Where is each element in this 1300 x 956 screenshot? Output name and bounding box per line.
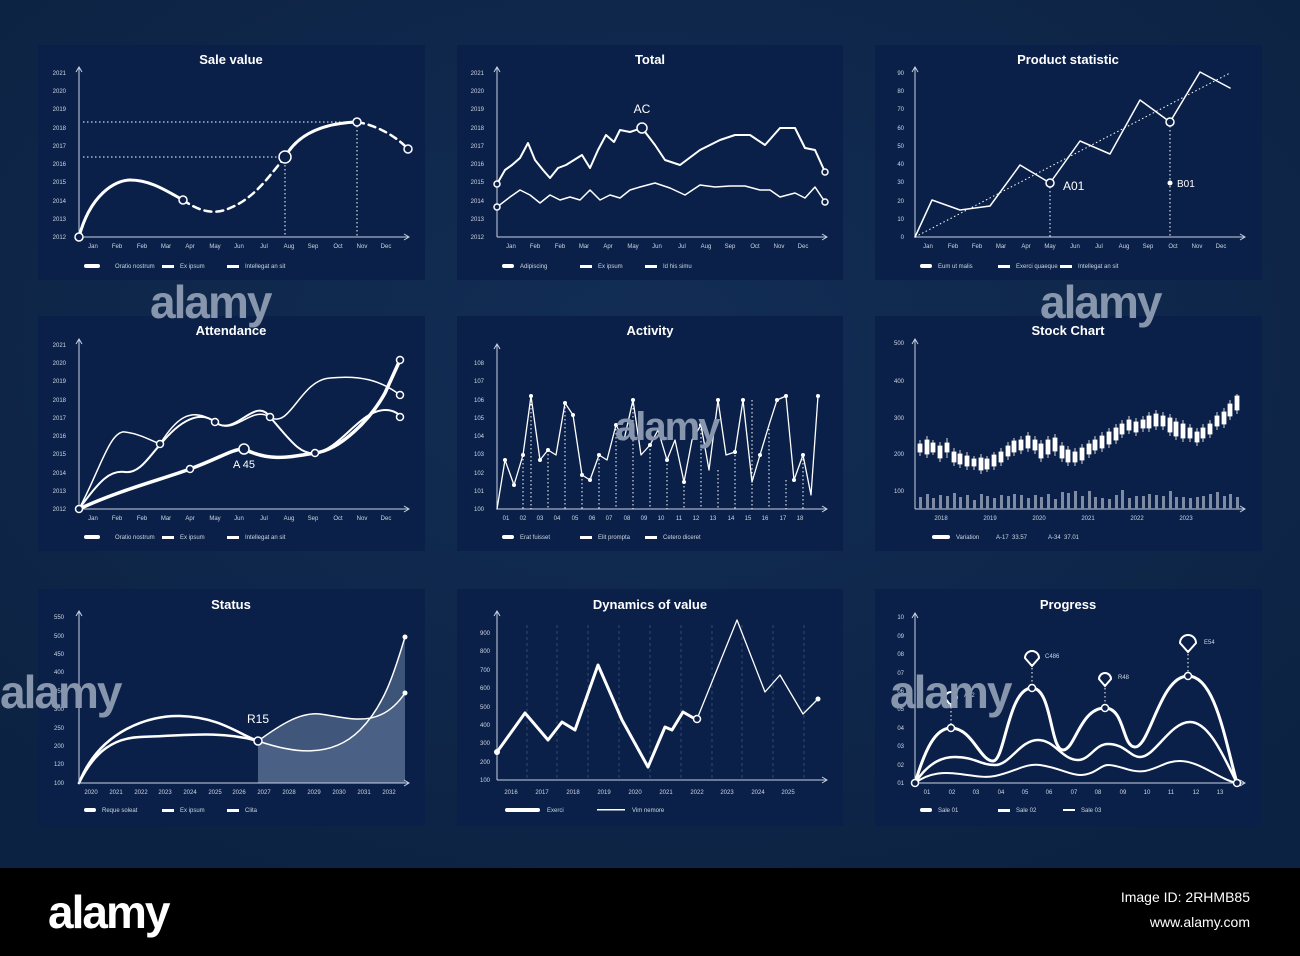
- panel: attendance: 2013: [53, 489, 67, 495]
- panel: total: [457, 45, 843, 280]
- legend: A-34 37.01: [1048, 535, 1080, 541]
- panel: status: 550: [54, 615, 65, 621]
- panel: status: 2032: [382, 790, 396, 796]
- panel: status: 2024: [183, 790, 197, 796]
- panel: status: 2027: [257, 790, 271, 796]
- panel: progress: 02: [949, 790, 956, 796]
- panel: stock chart: 2020: [1032, 516, 1046, 522]
- panel: activity: 18: [797, 516, 804, 522]
- legend: Exerci: [547, 808, 564, 814]
- title: dynamics of value: Dynamics of value: [593, 597, 707, 612]
- panel: progress: 08: [897, 652, 905, 658]
- panel: attendance: May: [209, 516, 221, 522]
- panel: progress: 04: [998, 790, 1005, 796]
- panel: total: 2013: [471, 217, 485, 223]
- legend: Reque soleat: [102, 808, 138, 814]
- legend: Eum ut malis: [938, 264, 973, 270]
- panel: sale value: Mar: [161, 244, 171, 250]
- legend: Sale 01: [938, 808, 959, 814]
- legend: Ex ipsum: [180, 264, 205, 270]
- line chart: total: [494, 102, 828, 210]
- legend: [920, 808, 1102, 814]
- panel: status: 2026: [232, 790, 246, 796]
- line chart: attendance: A 45: [233, 459, 255, 471]
- panel: status: 350: [54, 689, 65, 695]
- panel: attendance: 2019: [53, 379, 67, 385]
- legend: [502, 264, 692, 270]
- panel: dynamics of value: 2021: [659, 790, 673, 796]
- panel: progress: [875, 589, 1262, 826]
- panel: total: May: [627, 244, 639, 250]
- panel: progress: 13: [1217, 790, 1224, 796]
- panel: total: Oct: [750, 244, 760, 250]
- legend: Intellegat an sit: [245, 535, 286, 541]
- panel: activity: 17: [780, 516, 787, 522]
- panel: attendance: Aug: [284, 516, 294, 522]
- panel: product statistic: Apr: [1021, 244, 1031, 250]
- panel: dynamics of value: 400: [480, 723, 491, 729]
- panel: progress: 10: [1144, 790, 1151, 796]
- panel: sale value: Jul: [260, 244, 268, 250]
- panel: sale value: Aug: [284, 244, 294, 250]
- panel: dynamics of value: 800: [480, 649, 491, 655]
- panel: sale value: 2019: [53, 107, 67, 113]
- legend: Oratio nostrum: [115, 535, 155, 541]
- legend: [932, 535, 1080, 541]
- panel: product statistic: 60: [897, 126, 905, 132]
- legend: Intellegat an sit: [245, 264, 286, 270]
- panel: status: 2029: [307, 790, 321, 796]
- panel: status: 2021: [109, 790, 123, 796]
- panel: sale value: Apr: [185, 244, 195, 250]
- panel: activity: 101: [474, 489, 485, 495]
- line chart: progress: C486: [1045, 654, 1060, 660]
- panel: progress: 03: [897, 744, 905, 750]
- legend: Exerci quaeque: [1016, 264, 1058, 270]
- panel: status: 300: [54, 707, 65, 713]
- panel: dynamics of value: 200: [480, 760, 491, 766]
- panel: sale value: Sep: [308, 244, 319, 250]
- panel: product statistic: Feb: [972, 244, 983, 250]
- panel: activity: 01: [503, 516, 510, 522]
- panel: total: 2020: [471, 89, 485, 95]
- panel: activity: 14: [728, 516, 735, 522]
- panel: dynamics of value: 2025: [781, 790, 795, 796]
- panel: product statistic: 80: [897, 89, 905, 95]
- legend: Variation: [956, 535, 979, 541]
- title: stock chart: Stock Chart: [1032, 323, 1105, 338]
- watermarks: alamy: [1040, 276, 1163, 328]
- panel: attendance: Jan: [88, 516, 98, 522]
- panel: sale value: 2012: [53, 235, 67, 241]
- panel: progress: 11: [1168, 790, 1175, 796]
- panel: sale value: Jun: [234, 244, 244, 250]
- panel: product statistic: 70: [897, 107, 905, 113]
- panel: product statistic: 30: [897, 180, 905, 186]
- legend: A-17 33.57: [996, 535, 1028, 541]
- footer bar: alamy: [48, 886, 171, 938]
- panel: stock chart: [875, 316, 1262, 551]
- panel: sale value: 2016: [53, 162, 67, 168]
- panel: activity: 10: [658, 516, 665, 522]
- panel: stock chart: 2018: [934, 516, 948, 522]
- line chart: activity: [497, 394, 820, 509]
- panel: dynamics of value: 2017: [535, 790, 549, 796]
- watermarks: alamy: [615, 405, 721, 449]
- title: activity: Activity: [627, 323, 674, 338]
- panel: status: 100: [54, 781, 65, 787]
- watermarks: [0, 276, 1163, 718]
- panel: activity: 03: [537, 516, 544, 522]
- panel: sale value: 2013: [53, 217, 67, 223]
- line chart: progress: A12: [964, 693, 975, 699]
- panel: stock chart: 100: [894, 489, 905, 495]
- legend: [84, 535, 286, 541]
- panel: product statistic: 20: [897, 199, 905, 205]
- panel: sale value: 2014: [53, 199, 67, 205]
- panel: product statistic: Jan: [923, 244, 933, 250]
- panel: progress: 06: [1046, 790, 1053, 796]
- panel: dynamics of value: 900: [480, 631, 491, 637]
- area chart: status: R15: [247, 712, 269, 726]
- panel: activity: 107: [474, 379, 485, 385]
- panel: status: 2025: [208, 790, 222, 796]
- title: attendance: Attendance: [196, 323, 266, 338]
- legend: [84, 264, 286, 270]
- panel: stock chart: 500: [894, 341, 905, 347]
- watermarks: alamy: [0, 666, 123, 718]
- line chart: product statistic: B01: [1177, 179, 1195, 190]
- panel: activity: 15: [745, 516, 752, 522]
- panel: sale value: [38, 45, 425, 280]
- panel: product statistic: [875, 45, 1262, 280]
- panel: activity: 09: [641, 516, 648, 522]
- panel: status: [38, 589, 425, 826]
- panel: sale value: Nov: [357, 244, 367, 250]
- legend: Ex ipsum: [598, 264, 623, 270]
- panel: status: 2028: [282, 790, 296, 796]
- watermarks: alamy: [150, 276, 273, 328]
- panel: sale value: 2020: [53, 89, 67, 95]
- panel: total: Aug: [701, 244, 711, 250]
- panel: sale value: Oct: [333, 244, 343, 250]
- footer bar: [0, 868, 1300, 956]
- panel: product statistic: 0: [901, 235, 905, 241]
- legend: [920, 264, 1119, 270]
- panel: sale value: 2021: [53, 71, 67, 77]
- panel: stock chart: 2023: [1179, 516, 1193, 522]
- legend: Id his simu: [663, 264, 692, 270]
- panel: dynamics of value: 2018: [566, 790, 580, 796]
- panel: progress: 09: [1120, 790, 1127, 796]
- legend: Ex ipsum: [180, 808, 205, 814]
- panel: attendance: Sep: [308, 516, 319, 522]
- panel: sale value: 2017: [53, 144, 67, 150]
- panel: dynamics of value: 2020: [628, 790, 642, 796]
- panel: product statistic: Dec: [1216, 244, 1226, 250]
- panel: activity: 103: [474, 452, 485, 458]
- panel: sale value: Feb: [137, 244, 148, 250]
- panel: status: 2023: [158, 790, 172, 796]
- panel: progress: 12: [1193, 790, 1200, 796]
- legend: Sale 02: [1016, 808, 1037, 814]
- panel: total: Sep: [725, 244, 736, 250]
- line chart: progress: [912, 635, 1240, 786]
- line chart: attendance: [76, 356, 404, 512]
- panel: dynamics of value: 100: [480, 778, 491, 784]
- panel: product statistic: Nov: [1192, 244, 1202, 250]
- line chart: product statistic: A01: [1063, 179, 1085, 193]
- legend: [502, 535, 701, 541]
- title: progress: Progress: [1040, 597, 1096, 612]
- panel: sale value: 2015: [53, 180, 67, 186]
- panel: dynamics of value: 2019: [597, 790, 611, 796]
- panel: status: 500: [54, 634, 65, 640]
- panel: status: 400: [54, 670, 65, 676]
- panel: activity: 105: [474, 416, 485, 422]
- panel: progress: 01: [924, 790, 931, 796]
- title: total: Total: [635, 52, 665, 67]
- panel: status: 200: [54, 744, 65, 750]
- legend: Vim nemore: [632, 808, 665, 814]
- watermarks: alamy: [890, 666, 1013, 718]
- panel: product statistic: Aug: [1119, 244, 1129, 250]
- panel: activity: 05: [572, 516, 579, 522]
- legend: Elit prompta: [598, 535, 631, 541]
- panel: dynamics of value: 2016: [504, 790, 518, 796]
- pins: [945, 635, 1196, 706]
- panel: stock chart: 300: [894, 416, 905, 422]
- panel: product statistic: 50: [897, 144, 905, 150]
- panel: total: Nov: [774, 244, 784, 250]
- panel: status: 2022: [134, 790, 148, 796]
- panel: product statistic: Jul: [1095, 244, 1103, 250]
- legend: [84, 808, 258, 814]
- line chart: progress: R48: [1118, 675, 1130, 681]
- panel: progress: 03: [973, 790, 980, 796]
- panel: total: Dec: [798, 244, 808, 250]
- panel: status: 2030: [332, 790, 346, 796]
- line chart: total: AC: [634, 102, 651, 116]
- legend: Erat fuisset: [520, 535, 550, 541]
- panel: activity: 106: [474, 398, 485, 404]
- panel: attendance: 2012: [53, 507, 67, 513]
- panel: dynamics of value: 300: [480, 741, 491, 747]
- panel: stock chart: 2019: [983, 516, 997, 522]
- panel: attendance: 2018: [53, 398, 67, 404]
- panel: total: Jan: [506, 244, 516, 250]
- area chart: status: [79, 634, 408, 783]
- title: sale value: Sale value: [199, 52, 263, 67]
- legend: Clita: [245, 808, 258, 814]
- panel: total: Mar: [579, 244, 589, 250]
- panel: activity: 02: [520, 516, 527, 522]
- panel: progress: 08: [1095, 790, 1102, 796]
- panel: total: 2014: [471, 199, 485, 205]
- panel: activity: 11: [676, 516, 683, 522]
- panel: total: 2016: [471, 162, 485, 168]
- panel: attendance: 2016: [53, 434, 67, 440]
- panel: dynamics of value: 500: [480, 705, 491, 711]
- panel: status: 250: [54, 726, 65, 732]
- panel: attendance: 2014: [53, 471, 67, 477]
- panel: product statistic: Mar: [996, 244, 1006, 250]
- legend: Oratio nostrum: [115, 264, 155, 270]
- panel: attendance: 2017: [53, 416, 67, 422]
- panel: dynamics of value: 2024: [751, 790, 765, 796]
- panel: product statistic: Sep: [1143, 244, 1154, 250]
- panel: product statistic: Feb: [948, 244, 959, 250]
- line chart: progress: E54: [1204, 640, 1215, 646]
- panel: activity: 06: [589, 516, 596, 522]
- panel: total: Jul: [678, 244, 686, 250]
- panel: total: 2015: [471, 180, 485, 186]
- panel: activity: 04: [554, 516, 561, 522]
- panel: attendance: [38, 316, 425, 551]
- footer bar: www.alamy.com: [1149, 914, 1250, 930]
- panel: attendance: Jun: [234, 516, 244, 522]
- title: product statistic: Product statistic: [1017, 52, 1119, 67]
- panel: progress: 04: [897, 726, 905, 732]
- panel: attendance: Jul: [260, 516, 268, 522]
- line chart: dynamics: [494, 620, 820, 767]
- title: status: Status: [211, 597, 251, 612]
- legend: Adipiscing: [520, 264, 547, 270]
- panel: stock chart: 200: [894, 452, 905, 458]
- panel: attendance: 2021: [53, 343, 67, 349]
- legend: Sale 03: [1081, 808, 1102, 814]
- panel: total: 2017: [471, 144, 485, 150]
- panel: activity: 102: [474, 471, 485, 477]
- panel: sale value: Dec: [381, 244, 391, 250]
- panel: activity: 07: [606, 516, 613, 522]
- panel: progress: 09: [897, 634, 905, 640]
- panel: total: Apr: [603, 244, 613, 250]
- legend: Ex ipsum: [180, 535, 205, 541]
- panel: stock chart: 2022: [1130, 516, 1144, 522]
- footer bar: Image ID: 2RHMB85: [1121, 889, 1250, 905]
- panel: progress: 02: [897, 763, 905, 769]
- panel: progress: 06: [897, 689, 905, 695]
- panel: stock chart: 400: [894, 379, 905, 385]
- panel: progress: 05: [1022, 790, 1029, 796]
- panel: status: 2031: [357, 790, 371, 796]
- panel: activity: 108: [474, 361, 485, 367]
- panel: total: 2021: [471, 71, 485, 77]
- panel: total: Feb: [555, 244, 566, 250]
- candlesticks: [918, 394, 1239, 474]
- panel: product statistic: 10: [897, 217, 905, 223]
- panel: status: 2020: [84, 790, 98, 796]
- line chart: product statistic: [915, 72, 1230, 237]
- panel: activity: 16: [762, 516, 769, 522]
- panel: attendance: Apr: [185, 516, 195, 522]
- panel: attendance: 2020: [53, 361, 67, 367]
- panel: dynamics of value: 2023: [720, 790, 734, 796]
- panel: dynamics of value: 2022: [690, 790, 704, 796]
- panel: product statistic: Oct: [1168, 244, 1178, 250]
- volume bars: [919, 490, 1239, 509]
- panel: progress: 01: [897, 781, 905, 787]
- panel: dynamics of value: 700: [480, 668, 491, 674]
- panel: progress: 07: [897, 671, 905, 677]
- panel: total: 2012: [471, 235, 485, 241]
- panel: sale value: Jan: [88, 244, 98, 250]
- line chart: sale value curve: [75, 118, 412, 241]
- panel: activity: [457, 316, 843, 551]
- panel: total: 2019: [471, 107, 485, 113]
- panel: product statistic: 40: [897, 162, 905, 168]
- panel: activity: 104: [474, 434, 485, 440]
- panel: dynamics of value: [457, 589, 843, 826]
- panel: sale value: May: [209, 244, 221, 250]
- legend: [505, 808, 665, 814]
- panel: product statistic: May: [1044, 244, 1056, 250]
- panel: activity: 08: [624, 516, 631, 522]
- panel: attendance: Mar: [161, 516, 171, 522]
- panel: product statistic: Jun: [1070, 244, 1080, 250]
- panel: attendance: Dec: [381, 516, 391, 522]
- panel: status: 120: [54, 762, 65, 768]
- legend: Cetero diceret: [663, 535, 701, 541]
- panel: total: Jun: [652, 244, 662, 250]
- panel: activity: 13: [710, 516, 717, 522]
- panel: sale value: Feb: [112, 244, 123, 250]
- panel: sale value: 2018: [53, 126, 67, 132]
- panel: activity: 100: [474, 507, 485, 513]
- panel: product statistic: 90: [897, 71, 905, 77]
- panel: attendance: Feb: [112, 516, 123, 522]
- panel: activity: 12: [693, 516, 700, 522]
- panel: total: 2018: [471, 126, 485, 132]
- panel: attendance: Feb: [137, 516, 148, 522]
- panel: stock chart: 2021: [1081, 516, 1095, 522]
- panel: progress: 07: [1071, 790, 1078, 796]
- panel: total: Feb: [530, 244, 541, 250]
- panel: dynamics of value: 600: [480, 686, 491, 692]
- panel: progress: 05: [897, 707, 905, 713]
- panel: attendance: 2015: [53, 452, 67, 458]
- panel: attendance: Oct: [333, 516, 343, 522]
- panel: status: 450: [54, 652, 65, 658]
- legend: Intellegat an sit: [1078, 264, 1119, 270]
- panel: progress: 10: [897, 615, 905, 621]
- panel: attendance: Nov: [357, 516, 367, 522]
